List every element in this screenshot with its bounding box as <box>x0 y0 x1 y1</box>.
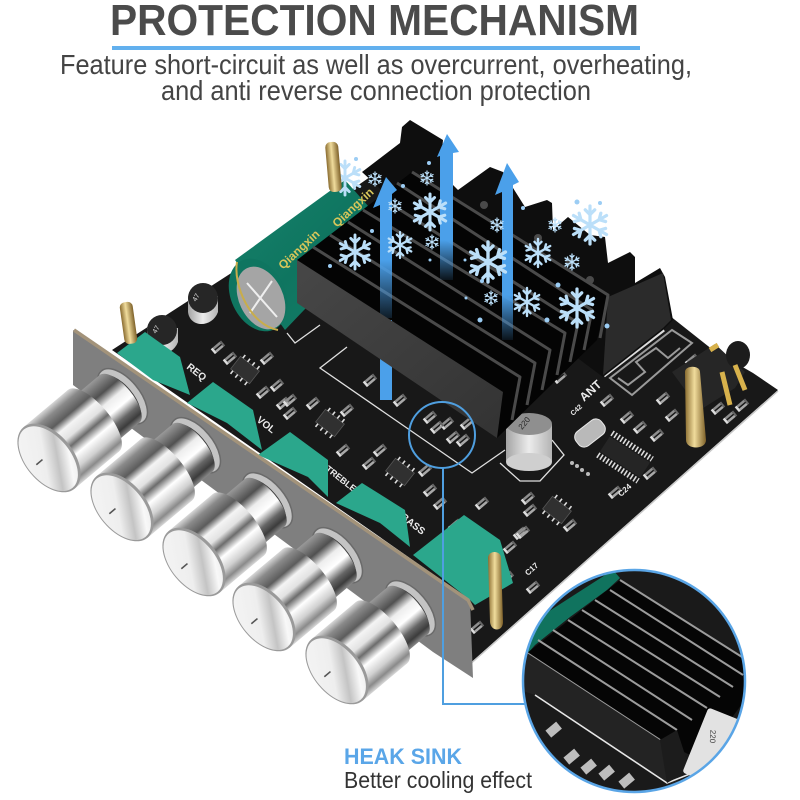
main chip <box>598 433 652 481</box>
heat sink <box>297 134 608 438</box>
arrow: airflow right <box>495 163 519 340</box>
snowflakes <box>328 157 610 328</box>
terminal screws <box>480 201 594 284</box>
subtitle <box>60 49 692 106</box>
terminal block <box>362 120 673 377</box>
silkscreen labels: TREBLE <box>324 464 358 494</box>
capacitor large <box>217 180 385 341</box>
heat sink front face <box>297 260 503 438</box>
fins <box>313 172 608 420</box>
zoomed board strip <box>528 572 620 652</box>
potentiometers <box>117 332 513 605</box>
chips <box>228 353 574 527</box>
panel edge <box>74 330 473 610</box>
zoomed channels <box>527 580 745 760</box>
capacitor 220: 220 <box>517 415 532 431</box>
crystal <box>572 416 608 450</box>
board trace outlines <box>287 325 564 481</box>
small capacitors <box>147 283 218 354</box>
zoomed base outline <box>535 695 700 783</box>
zoomed fins <box>527 580 743 740</box>
title underline <box>112 46 640 50</box>
arrow: airflow middle <box>437 134 459 280</box>
antenna pattern <box>604 330 692 395</box>
zoomed end teeth <box>660 730 684 783</box>
zoomed heat sink lens <box>520 570 745 792</box>
silkscreen labels: REQ <box>184 362 208 384</box>
heat sink base <box>297 172 608 438</box>
knobs <box>5 355 449 716</box>
subtitle: and anti reverse connection protection <box>161 75 591 106</box>
zoomed components <box>545 722 635 789</box>
capacitor large: Qiangxin <box>329 185 377 230</box>
capacitor 220 <box>506 413 552 471</box>
front panel <box>73 330 473 678</box>
snow dots <box>328 157 610 328</box>
subtitle: Feature short-circuit as well as overcurrent, overheating, <box>60 49 692 80</box>
board edge highlight <box>467 391 778 667</box>
silkscreen labels: ANT <box>577 377 605 404</box>
audio jack <box>672 341 750 410</box>
caption <box>344 744 533 793</box>
arrow: airflow left <box>373 177 397 400</box>
silkscreen labels: C17 <box>523 561 541 577</box>
zoomed capacitor: 220 <box>708 730 717 744</box>
silkscreen labels: C42 <box>570 404 584 417</box>
board pcb <box>112 170 778 666</box>
callout ring <box>409 402 475 468</box>
silkscreen labels: C24 <box>616 482 634 498</box>
capacitor large: Qiangxin <box>275 227 323 272</box>
small board components <box>211 341 749 634</box>
zoomed front face <box>520 653 680 785</box>
small capacitors: 47 <box>192 293 202 303</box>
silkscreen labels <box>184 362 634 577</box>
small capacitors: 47 <box>152 325 162 335</box>
amplifier board <box>112 170 778 667</box>
via dots <box>570 461 590 476</box>
standoffs <box>119 141 706 630</box>
callout connector <box>443 468 526 704</box>
caption: HEAK SINK <box>344 744 462 769</box>
caption: Better cooling effect <box>344 767 533 793</box>
zoomed capacitor <box>683 708 737 776</box>
silkscreen labels: BASS <box>398 512 427 538</box>
silkscreen labels: VOL <box>254 415 277 436</box>
